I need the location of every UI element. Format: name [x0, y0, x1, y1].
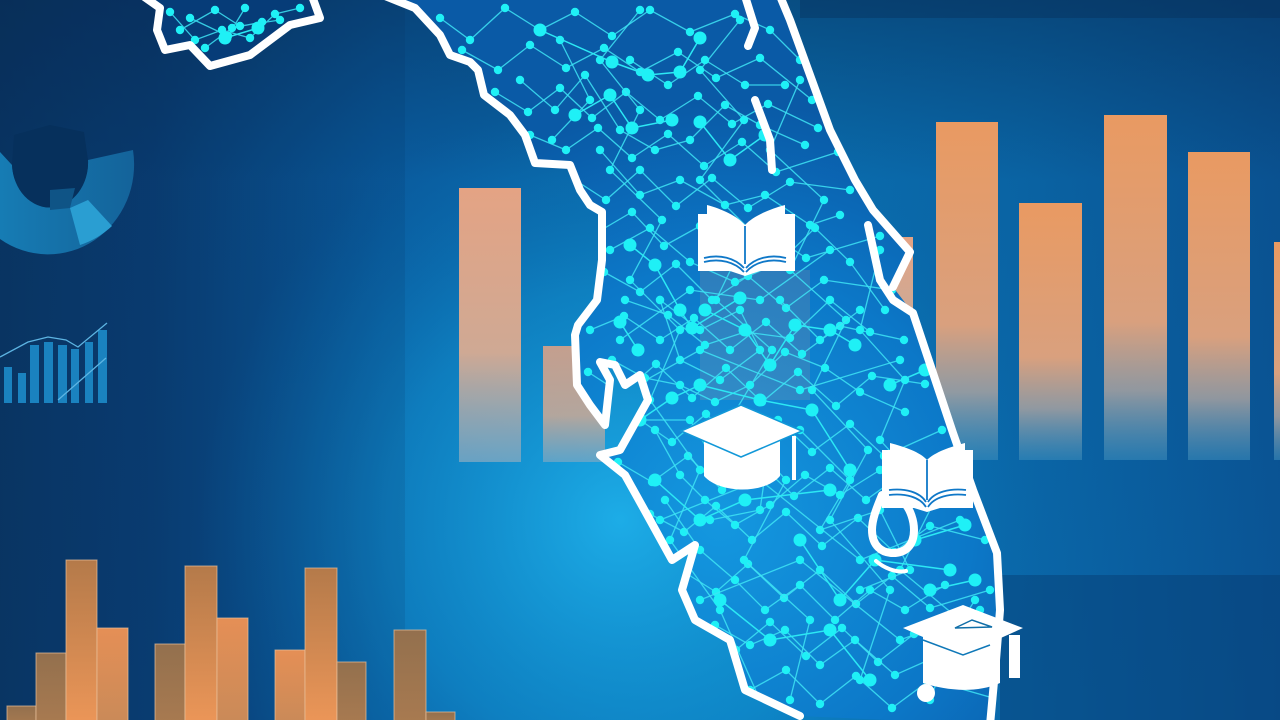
- map: Florida network: [142, 0, 1004, 720]
- bar chart: centre: [459, 188, 605, 462]
- icon: graduation cap (lower): [903, 605, 1023, 702]
- state fill: [156, 0, 996, 720]
- icon: graduation cap (centre): [681, 405, 802, 490]
- small line and bar chart: [0, 323, 107, 403]
- icon: open book (lower): [882, 443, 973, 512]
- donut chart: [0, 125, 134, 254]
- bar chart: bottom left: [7, 560, 455, 720]
- icon: open book (upper): [698, 205, 795, 276]
- network lines and nodes: [170, 8, 1000, 708]
- bright node clusters: [225, 28, 975, 680]
- bar chart: right: [880, 115, 1280, 460]
- coastline outline: [143, 0, 1000, 720]
- icon: loop ribbon: [872, 495, 914, 571]
